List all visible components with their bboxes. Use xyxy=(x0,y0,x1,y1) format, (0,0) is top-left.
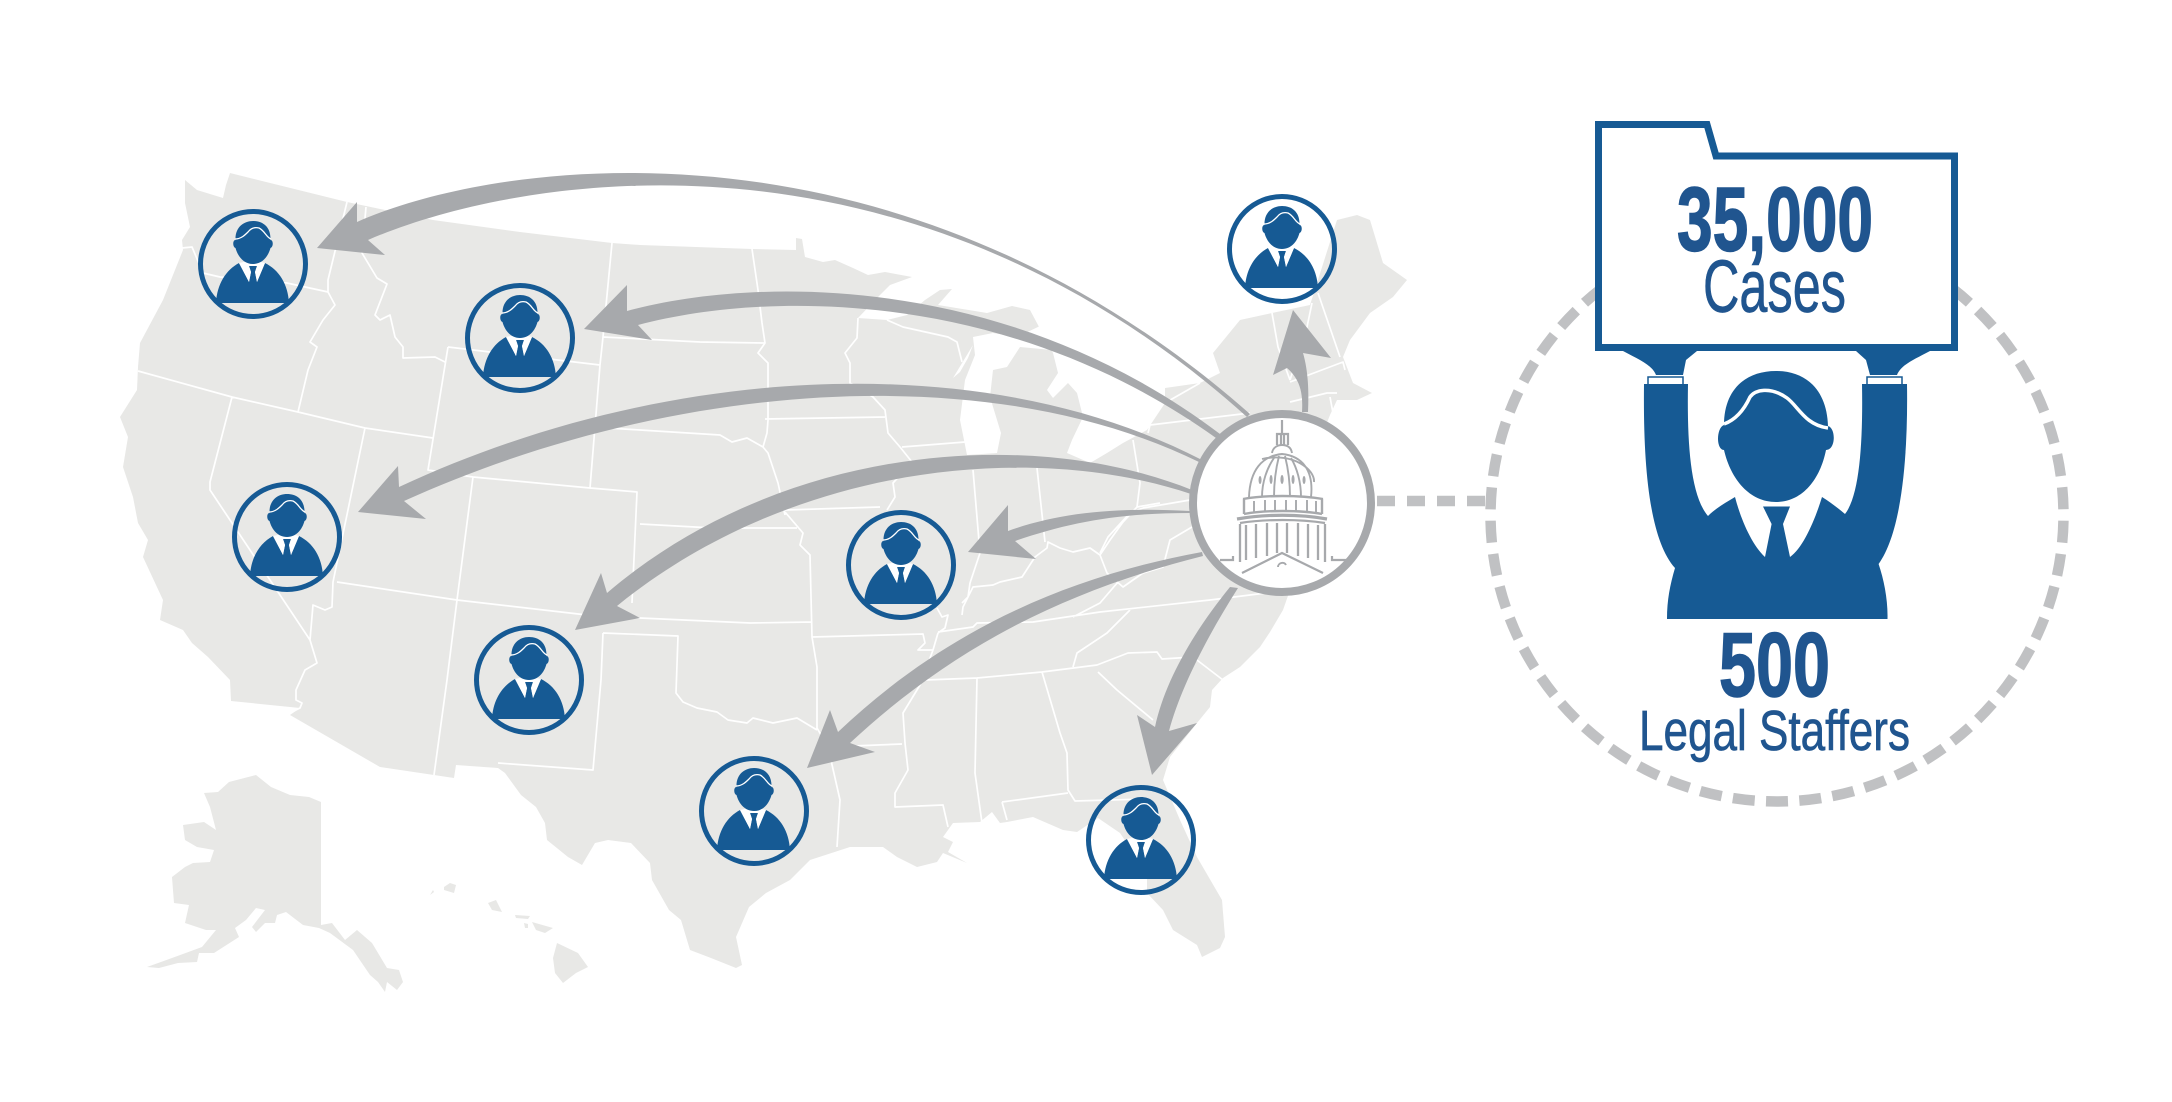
arrow: to Florida xyxy=(1137,587,1238,775)
arrow: to Nevada xyxy=(358,384,1202,519)
dashed circle xyxy=(1490,228,2064,802)
map of the United States xyxy=(120,173,1407,992)
arrow: to Montana xyxy=(584,285,1220,438)
arrow: to Texas xyxy=(807,552,1203,768)
stat: staffers xyxy=(1639,615,1910,763)
head xyxy=(1718,371,1834,502)
icon: staffer in Montana xyxy=(468,286,572,390)
icon: staffer in Nevada xyxy=(234,484,340,590)
label: Cases: Cases xyxy=(1703,245,1846,328)
icon: staffer in Missouri xyxy=(848,512,954,618)
arrow: to New England xyxy=(1273,310,1331,412)
number: 500: 500 xyxy=(1719,615,1830,716)
number: 35,000: 35,000 xyxy=(1677,170,1873,270)
hair highlight xyxy=(1724,390,1828,428)
icon: staffer in Florida xyxy=(1088,788,1194,892)
capitol building xyxy=(1220,420,1347,573)
icon: staffer in Texas xyxy=(702,758,806,864)
arrow: to Colorado xyxy=(575,455,1192,630)
map: state borders xyxy=(138,202,1345,847)
stat: cases xyxy=(1677,170,1873,328)
map: contiguous states xyxy=(120,173,1407,968)
map: Alaska xyxy=(147,775,403,992)
icon: staffer in Washington xyxy=(200,212,306,316)
map: Lake Michigan xyxy=(953,326,1052,455)
icon: staffer in Colorado xyxy=(476,628,582,732)
icon: staffer in New England xyxy=(1230,196,1334,302)
map: Hawaii xyxy=(430,883,588,983)
connector: dashed line xyxy=(1377,496,1487,506)
suit body xyxy=(1644,384,1907,619)
icon: staffer holding folder xyxy=(1623,351,1930,619)
cuffs xyxy=(1648,377,1902,384)
label: Legal Staffers: Legal Staffers xyxy=(1639,699,1910,763)
icon: capitol in circle xyxy=(1193,414,1371,592)
folder xyxy=(1598,124,1954,348)
hands xyxy=(1623,351,1930,375)
arrow: to Washington xyxy=(317,173,1250,417)
arrow: to Illinois xyxy=(968,505,1190,559)
